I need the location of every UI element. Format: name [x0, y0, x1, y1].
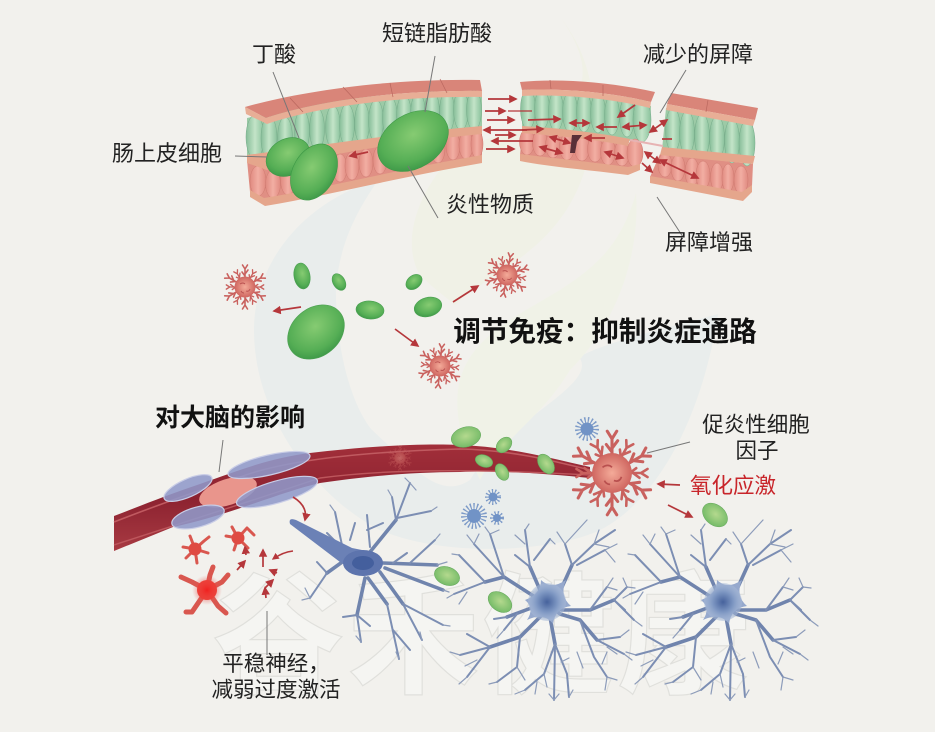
neuron middle	[447, 520, 642, 700]
arrow: cell to bacteria	[668, 505, 692, 517]
watermark: brand name: 谷禾健康	[212, 564, 752, 712]
watermark: green leaf lower	[457, 193, 636, 480]
label: intestinal epithelial cells: 肠上皮细胞	[112, 141, 222, 166]
watermark: blue crescent	[254, 179, 718, 549]
blood vessel	[114, 444, 590, 551]
label: reduced barrier: 减少的屏障	[643, 42, 753, 67]
leader lines: brain	[219, 440, 690, 655]
arrows: small calming	[237, 547, 293, 598]
arrows: immune regulation	[274, 286, 478, 346]
barrier: left intact segment	[245, 79, 483, 206]
bacteria along vessel and neurons	[432, 423, 732, 617]
heading: effect on brain: 对大脑的影响	[155, 404, 305, 432]
neuron right	[623, 520, 818, 700]
label: inflammatory substances: 炎性物质	[446, 192, 534, 217]
barrier: right segment	[650, 93, 758, 201]
large pro-inflammatory cell	[573, 431, 651, 515]
label: pro-inflammatory cytokines: 促炎性细胞	[702, 413, 810, 437]
immune cells	[224, 250, 531, 390]
watermark: green leaf upper	[412, 18, 593, 305]
label: cytokines line 2: 因子	[735, 439, 779, 463]
label: oxidative stress: 氧化应激	[690, 474, 776, 498]
barrier: middle damaged segment	[520, 80, 655, 175]
label: barrier enhancement: 屏障增强	[665, 230, 753, 255]
label: butyrate: 丁酸	[252, 42, 296, 67]
immune section: scattered bacteria	[277, 262, 444, 370]
label: short-chain fatty acids: 短链脂肪酸	[382, 21, 492, 46]
label: reduce overactivation: 减弱过度激活	[211, 678, 341, 702]
myelin sheaths	[161, 446, 320, 534]
arrow: vessel to neuron	[293, 497, 306, 520]
astrocytes	[181, 527, 254, 613]
arrow: oxidative stress to cell	[658, 484, 680, 485]
leader lines: barrier	[235, 56, 686, 237]
blue viruses	[464, 420, 596, 526]
inflammatory bacteria on barrier	[259, 98, 460, 208]
label: calm nerves: 平稳神经，	[222, 652, 330, 676]
heading: immune regulation: 调节免疫：抑制炎症通路	[453, 316, 757, 347]
arrow: inside barrier	[350, 152, 368, 156]
arrows: barrier crossing	[484, 99, 698, 178]
neuron left	[290, 478, 450, 659]
